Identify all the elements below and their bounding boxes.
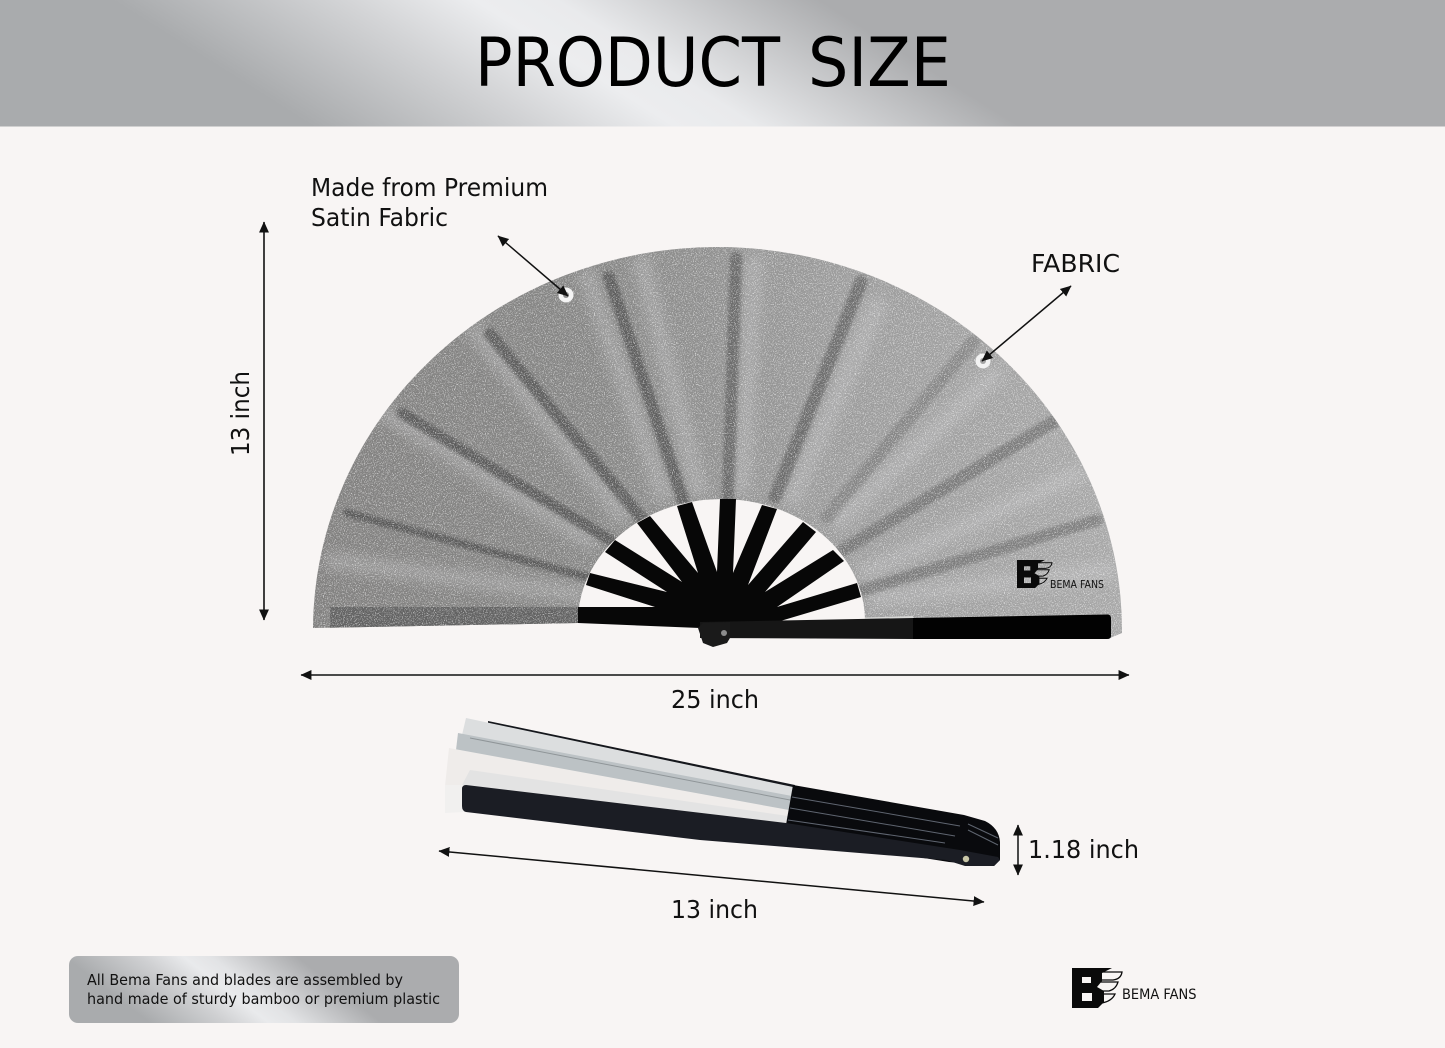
note text: hand made of sturdy bamboo or premium plastic — [87, 990, 440, 1008]
arrow: fan height — [263, 222, 265, 620]
logo mark — [1072, 968, 1122, 1008]
fan fabric — [313, 247, 1122, 638]
fan logo text: BEMA FANS — [1050, 579, 1104, 591]
front handle — [700, 614, 1111, 639]
label: fan width: 25 inch — [671, 685, 759, 714]
callout: premium satin fabric: Satin Fabric — [311, 203, 448, 232]
label: closed fan length: 13 inch — [671, 895, 758, 924]
open fan — [313, 247, 1122, 647]
label: fan height: 13 inch — [226, 371, 255, 456]
callout: premium satin fabric: Made from Premium — [311, 173, 548, 202]
black ribs — [784, 785, 1000, 866]
arrow: fabric pointer — [982, 286, 1071, 361]
fan logo — [1017, 560, 1052, 588]
closed fan rivet — [963, 856, 969, 862]
arrow: fan width — [301, 674, 1129, 676]
arrow: closed fan thickness — [1017, 825, 1019, 875]
folded fabric — [445, 718, 793, 823]
arrow: closed fan length — [439, 851, 984, 902]
title: PRODUCT — [475, 24, 780, 103]
bamboo sticks — [578, 499, 861, 628]
pivot rivet — [698, 622, 730, 647]
arrow: satin fabric pointer — [498, 236, 568, 296]
eyelet left — [558, 288, 574, 302]
header banner — [0, 0, 1445, 126]
light strip above handle — [865, 616, 913, 622]
brand logo — [1072, 968, 1197, 1008]
title: SIZE — [808, 24, 951, 103]
eyelet right — [976, 354, 990, 368]
label: thickness: 1.18 inch — [1028, 835, 1139, 864]
callout: fabric: FABRIC — [1031, 249, 1120, 278]
note background — [69, 956, 459, 1023]
black top edge — [488, 721, 795, 790]
note panel — [69, 956, 459, 1023]
closed fan — [445, 718, 1000, 866]
front stick — [462, 785, 1000, 866]
fabric folds and ribs — [313, 247, 1122, 638]
rib highlights — [788, 797, 998, 845]
logo text: BEMA FANS — [1122, 987, 1197, 1003]
note text: All Bema Fans and blades are assembled by — [87, 971, 403, 989]
